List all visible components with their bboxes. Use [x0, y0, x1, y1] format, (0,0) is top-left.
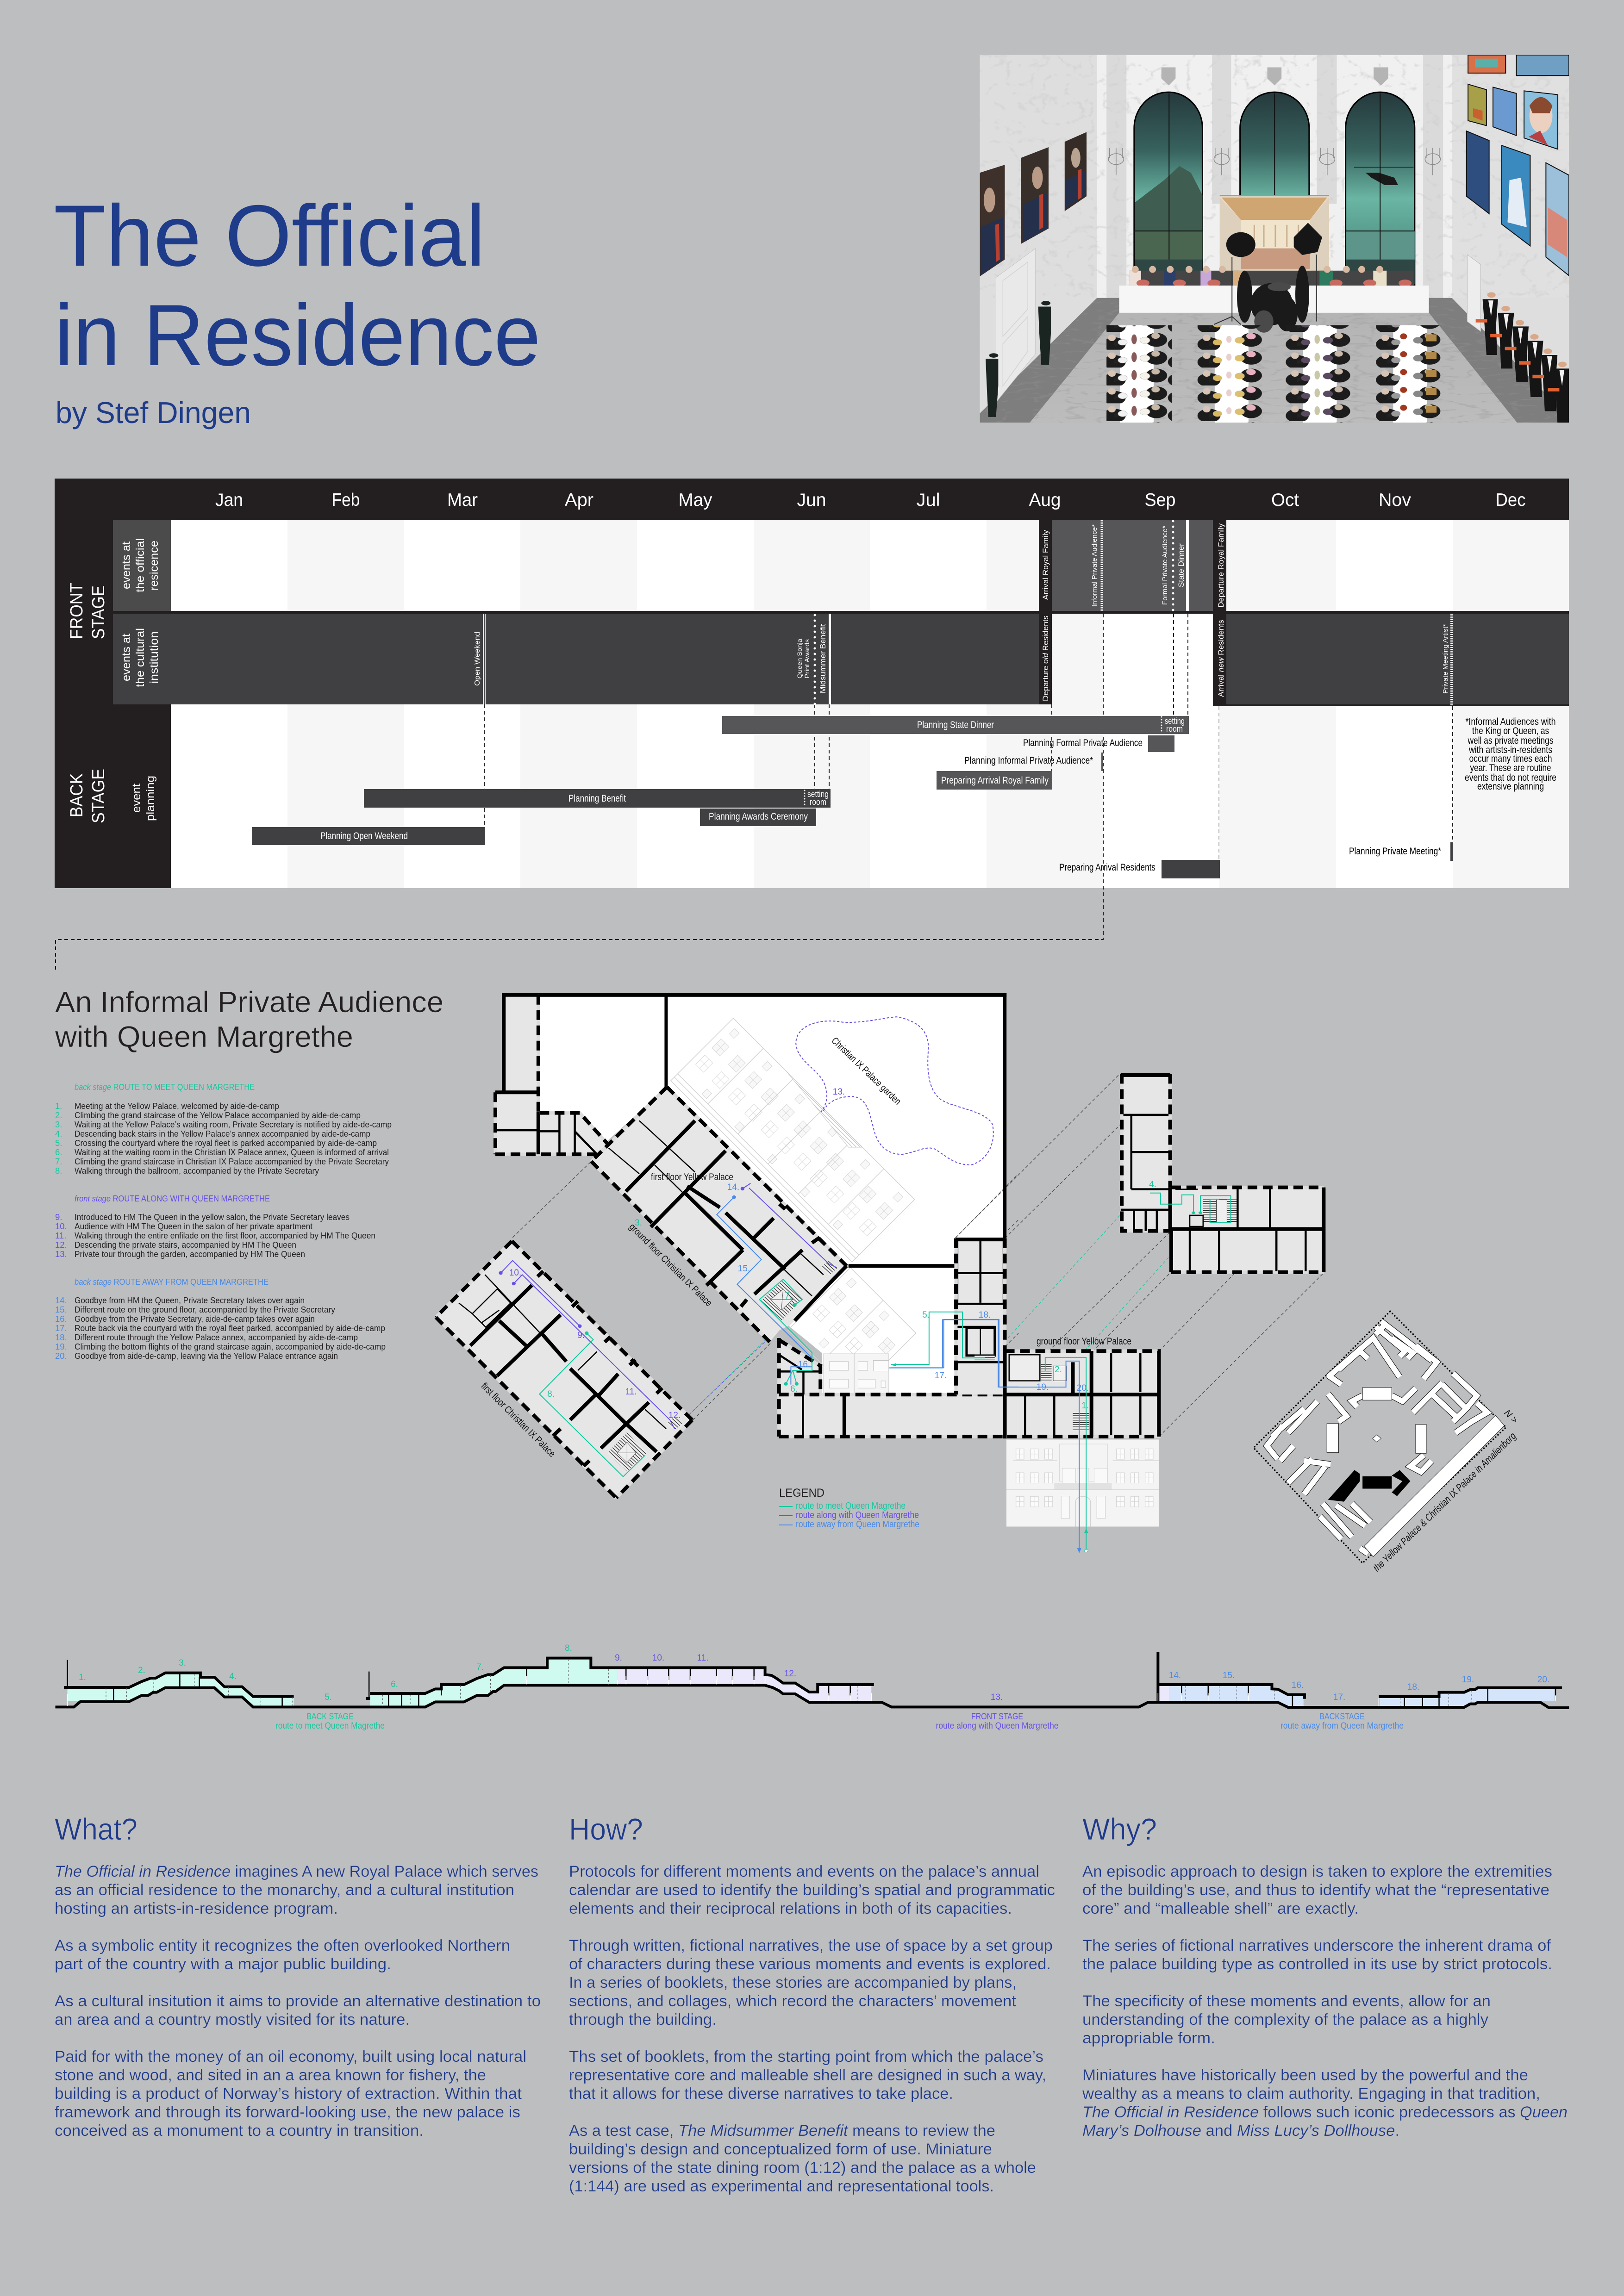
route list: along: 11. [55, 1231, 66, 1240]
row labels [120, 538, 161, 821]
text column: What?: stone and wood, and sited in an a area known for fishery, the [55, 2066, 486, 2084]
text column: What?: as an official residence to the monarchy, and a cultural institution [55, 1881, 514, 1899]
section route numbers: 20. [1537, 1675, 1549, 1685]
section captions [275, 1712, 1404, 1731]
planning labels [320, 716, 1441, 873]
month labels: Oct [1271, 490, 1299, 510]
crests [1162, 68, 1388, 86]
text column: How?: (1:144) are used as experimental and representational tools. [569, 2178, 994, 2195]
route list: to meet: 5. [55, 1138, 62, 1148]
section route numbers: 18. [1407, 1682, 1419, 1692]
route list: away: Goodbye from aide-de-camp, leaving via the Yellow Palace entrance again [75, 1351, 338, 1361]
text column: How?: In a series of booklets, these stories are accompanied by plans, [569, 1974, 1017, 1991]
sconces [1108, 148, 1440, 175]
section route numbers: 2. [138, 1666, 145, 1675]
section route numbers: 5. [325, 1692, 332, 1702]
route list: along: Private tour through the garden, accompanied by HM The Queen [75, 1249, 305, 1259]
event labels: Departure Royal Family [1217, 523, 1225, 608]
route list: to meet: Crossing the courtyard where the royal fleet is parked accompanied by aide-de-camp [75, 1138, 377, 1148]
section captions: route along with Queen Margrethe [936, 1721, 1058, 1731]
section route numbers: 9. [615, 1653, 622, 1663]
dining tables [1106, 325, 1172, 423]
plan route numbers: 8. [547, 1389, 555, 1399]
event labels: Midsummer Benefit [818, 624, 827, 693]
event labels: State Dinner [1177, 543, 1186, 587]
plan: west wing and walls [495, 995, 1006, 1266]
text column: Why?: Why? [1082, 1812, 1157, 1846]
row labels: resicence [148, 541, 161, 591]
band: royal stay [1052, 520, 1213, 611]
event labels: Arrival Royal Family [1041, 530, 1050, 600]
event labels: Arrival new Residents [1217, 620, 1225, 697]
route list: to meet: Walking through the ballroom, accompanied by the Private Secretary [75, 1166, 319, 1176]
route to meet [539, 1333, 645, 1477]
servants [1483, 299, 1569, 423]
band: cultural institution [171, 614, 1569, 706]
plan route numbers: 5. [922, 1310, 930, 1320]
plan labels: ground floor Yellow Palace [1037, 1336, 1131, 1347]
text column: What?: As a symbolic entity it recognizes the often overlooked Northern [55, 1937, 510, 1954]
legend [779, 1487, 919, 1530]
stage labels: BACK [67, 773, 87, 817]
event markers [483, 520, 1452, 706]
calendar footnote: the King or Queen, as [1472, 726, 1549, 736]
legend: route to meet Queen Magrethe [796, 1501, 906, 1511]
text column: What?: As a cultural insitution it aims to provide an alternative destination to [55, 1992, 541, 2010]
title: in Residence [55, 286, 541, 384]
route list: away: 14. [55, 1295, 67, 1305]
route list: to meet: 6. [55, 1147, 62, 1157]
plan route numbers: 20. [1077, 1383, 1089, 1393]
text column: How?: that it allows for these diverse narratives to take place. [569, 2085, 953, 2103]
planning labels: Planning State Dinner [917, 720, 994, 730]
plan route numbers: 3. [635, 1218, 642, 1228]
plan: first floor Christian IX Palace [436, 1241, 692, 1498]
text column: Why?: wealthy as a means to claim authority. Engaging in that tradition, [1082, 2085, 1540, 2103]
route list: along: 10. [55, 1221, 67, 1231]
month labels [215, 490, 1526, 510]
section route numbers: 14. [1169, 1671, 1181, 1680]
section route numbers: 15. [1223, 1671, 1235, 1680]
legend: route away from Queen Margrethe [796, 1519, 919, 1530]
plan route numbers: 10. [509, 1268, 521, 1278]
route list: to meet: 1. [55, 1101, 62, 1111]
route away [717, 1197, 812, 1385]
route list: to meet: Climbing the grand staircase in Christian IX Palace accompanied by the Private Secretary [75, 1157, 389, 1166]
route list: away: 15. [55, 1305, 67, 1314]
calendar footnote: year. These are routine [1470, 763, 1551, 773]
backdrop [1220, 196, 1329, 284]
text column: What?: conceived as a monument to a country in transition. [55, 2122, 424, 2140]
month labels: Jan [215, 490, 243, 510]
plan route numbers: 18. [979, 1310, 991, 1320]
text column: Why?: understanding of the complexity of the palace as a highly [1082, 2011, 1488, 2028]
text column: How?: of characters during these various moments and events is explored. [569, 1955, 1051, 1973]
plan route numbers: 17. [935, 1371, 947, 1381]
plan: ground floor Christian IX Palace [591, 1087, 847, 1342]
site plan: Amalienborg [1254, 1311, 1506, 1563]
small elevation [824, 1354, 889, 1394]
text column: Why?: The series of fictional narratives underscore the inherent drama of [1082, 1937, 1551, 1954]
section route numbers: 3. [179, 1658, 186, 1668]
calendar footnote: with artists-in-residents [1468, 745, 1552, 755]
text column: Why?: Miniatures have historically been used by the powerful and the [1082, 2066, 1528, 2084]
plan labels: ground floor Christian IX Palace [627, 1221, 714, 1308]
section route numbers: 8. [565, 1643, 572, 1653]
planning labels: Preparing Arrival Royal Family [941, 775, 1049, 786]
route section diagram [56, 1652, 1569, 1708]
text column: Why?: Mary’s Dolhouse and Miss Lucy’s Dollhouse. [1082, 2122, 1399, 2140]
section route numbers: 11. [697, 1653, 709, 1663]
plan: first floor Yellow Palace [1121, 1074, 1324, 1272]
route list: along: 13. [55, 1249, 67, 1259]
planning labels: Planning Awards Ceremony [709, 811, 808, 822]
route list: away: Goodbye from HM the Queen, Private Secretary takes over again [75, 1295, 305, 1305]
text column: What?: The Official in Residence imagines A new Royal Palace which serves [55, 1863, 538, 1880]
plan route numbers: 7. [785, 1291, 792, 1301]
route list: to meet: 3. [55, 1120, 62, 1129]
route list: to meet: 4. [55, 1129, 62, 1139]
event labels: Open Weekend [474, 632, 481, 686]
back wall [1097, 55, 1452, 299]
planning labels: setting [1165, 716, 1185, 726]
plan labels: first floor Yellow Palace [651, 1172, 733, 1182]
stage labels: STAGE [89, 585, 108, 639]
plan route numbers: 14. [727, 1182, 739, 1192]
row labels: planning [144, 776, 157, 821]
calendar footnote: well as private meetings [1468, 735, 1554, 746]
section route numbers: 6. [391, 1680, 398, 1689]
planning labels: room [810, 797, 826, 807]
route list: away: 16. [55, 1314, 67, 1324]
planning labels: room [1166, 724, 1183, 734]
route list: along: Audience with HM The Queen in the salon of her private apartment [75, 1221, 312, 1231]
annual calendar chart [55, 479, 1569, 971]
windows [1134, 92, 1415, 286]
event labels [474, 523, 1449, 701]
dashed event links [56, 614, 1453, 971]
door [995, 249, 1036, 403]
section captions: BACKSTAGE [1319, 1712, 1365, 1722]
route list: to meet: Waiting at the Yellow Palace’s waiting room, Private Secretary is notified by aide-de-camp [75, 1120, 392, 1129]
planning labels: Planning Informal Private Audience* [964, 755, 1093, 766]
stage labels: FRONT [67, 583, 87, 639]
text column: How?: representative core and malleable shell are designed in such a way, [569, 2066, 1046, 2084]
planning labels: Planning Benefit [568, 793, 626, 804]
route list: along: front stage ROUTE ALONG WITH QUEEN MARGRETHE [75, 1194, 270, 1203]
text column: What?: building is a product of Norway’s history of extraction. Within that [55, 2085, 522, 2103]
text column: Why?: The Official in Residence follows such iconic predecessors as Queen [1082, 2103, 1568, 2121]
text column: How? [569, 1812, 1055, 2195]
plan route numbers: 15. [738, 1264, 750, 1274]
facade elevation of Yellow Palace [1006, 1439, 1159, 1527]
text column: How?: calendar are used to identify the building’s spatial and programmatic [569, 1881, 1055, 1899]
site plan caption: the Yellow Palace & Christian IX Palace in Amalienborg [1371, 1430, 1518, 1574]
side walls [980, 55, 1097, 413]
legend: route along with Queen Margrethe [796, 1510, 919, 1520]
section route numbers: 10. [652, 1653, 664, 1663]
row labels: the cultural [134, 628, 147, 687]
guards [986, 301, 1051, 417]
planning labels: Planning Open Weekend [320, 831, 408, 841]
planning labels: setting [807, 790, 829, 799]
artworks right [1468, 55, 1505, 73]
section captions: route away from Queen Margrethe [1280, 1721, 1404, 1731]
event labels: Queen Sonja [796, 639, 803, 678]
route list: away: back stage ROUTE AWAY FROM QUEEN MARGRETHE [75, 1277, 269, 1287]
text column: Why?: The specificity of these moments and events, allow for an [1082, 1992, 1491, 2010]
route list: away: Route back via the courtyard with the royal fleet parked, accompanied by aide-de-camp [75, 1323, 385, 1333]
row labels: event [130, 784, 143, 813]
section route numbers: 19. [1462, 1675, 1474, 1685]
plan route numbers: 11. [625, 1387, 637, 1397]
month labels: Feb [331, 490, 360, 510]
section heading [55, 985, 443, 1053]
byline: by Stef Dingen [56, 396, 251, 429]
month labels: Mar [447, 490, 478, 510]
month labels: Aug [1029, 490, 1061, 510]
portraits left [980, 165, 1005, 276]
text column: Why?: appropriable form. [1082, 2029, 1215, 2047]
plan route numbers: 2. [1055, 1365, 1062, 1375]
calendar footnote: *Informal Audiences with [1466, 716, 1555, 727]
section captions: route to meet Queen Magrethe [275, 1721, 385, 1731]
plan route numbers: 19. [1037, 1382, 1049, 1392]
section route numbers: 12. [784, 1669, 796, 1679]
routes [499, 1017, 1230, 1553]
route list: along: Walking through the entire enfilade on the first floor, accompanied by HM The Queen [75, 1231, 375, 1240]
route list: away: 18. [55, 1332, 67, 1342]
guests row [1130, 266, 1413, 286]
route list: to meet: Descending back stairs in the Yellow Palace’s annex accompanied by aide-de-camp [75, 1129, 370, 1139]
text column: What?: What? [55, 1812, 137, 1846]
route list: to meet: back stage ROUTE TO MEET QUEEN MARGRETHE [75, 1082, 255, 1092]
plan: courtyard and garden [539, 997, 1004, 1395]
month labels: Jul [917, 490, 940, 510]
planning labels: Planning Private Meeting* [1349, 846, 1441, 857]
section route numbers [79, 1643, 1549, 1702]
plan route numbers: 1. [1081, 1401, 1089, 1411]
planning labels: Preparing Arrival Residents [1059, 862, 1156, 873]
site plan caption: N > [1502, 1408, 1519, 1425]
route list: along [55, 1194, 375, 1259]
event labels: Formal Private Audience* [1161, 526, 1169, 605]
route list: to meet: 7. [55, 1157, 62, 1166]
row label cells [113, 520, 171, 704]
section captions: BACK STAGE [306, 1712, 354, 1722]
row labels: the official [134, 538, 147, 592]
calendar backing [55, 479, 1569, 888]
planning bars [252, 716, 1453, 878]
route list: along: 9. [55, 1212, 62, 1222]
route list: away [55, 1277, 386, 1361]
stage labels: STAGE [89, 769, 108, 823]
plan route numbers: 4. [1149, 1180, 1156, 1189]
row labels: events at [120, 541, 133, 589]
route list: to meet [55, 1082, 392, 1176]
text column: How?: sections, and collages, which record the characters’ movement [569, 1992, 1017, 2010]
text column: How?: elements and their reciprocal relations in both of its capacities. [569, 1900, 1012, 1917]
planning labels: Planning Formal Private Audience [1023, 738, 1143, 748]
route list: along: Introduced to HM The Queen in the yellow salon, the Private Secretary leaves [75, 1212, 350, 1222]
text column: How?: Protocols for different moments and events on the palace’s annual [569, 1863, 1039, 1880]
head table [1119, 286, 1429, 313]
projection lines [512, 1161, 1018, 1473]
month labels: Jun [797, 490, 826, 510]
section fills [68, 1674, 294, 1706]
section captions: FRONT STAGE [971, 1712, 1023, 1722]
text column: What?: hosting an artists-in-residence program. [55, 1900, 338, 1917]
route list: away: 17. [55, 1323, 67, 1333]
section route numbers: 4. [229, 1672, 237, 1681]
text column: How?: versions of the state dining room (1:12) and the palace as a whole [569, 2159, 1036, 2177]
text column: Why?: the palace building type as controlled in its use by strict protocols. [1082, 1955, 1552, 1973]
route list: away: 20. [55, 1351, 67, 1361]
month labels: Dec [1495, 490, 1526, 510]
section route numbers: 13. [991, 1692, 1003, 1702]
event labels: Departure old Residents [1041, 616, 1050, 701]
route along [743, 1183, 837, 1268]
route list: along: 12. [55, 1240, 67, 1250]
text column: How?: through the building. [569, 2011, 717, 2028]
text column: What?: part of the country with a major public building. [55, 1955, 391, 1973]
section heading: An Informal Private Audience [55, 985, 443, 1019]
month labels: Sep [1144, 490, 1176, 510]
row labels: institution [148, 631, 161, 684]
month labels: Apr [565, 490, 593, 510]
plan labels: first floor Christian IX Palace [479, 1381, 557, 1459]
section route numbers: 16. [1292, 1680, 1304, 1690]
garden elevation [671, 1018, 915, 1262]
text column: Why?: core” and “malleable shell” are exactly. [1082, 1900, 1359, 1917]
text column: Why? [1082, 1812, 1568, 2140]
text column: How?: Ths set of booklets, from the starting point from which the palace’s [569, 2048, 1043, 2066]
plan route numbers [509, 1087, 1156, 1420]
text column: Why?: of the building’s use, and thus to identify what the “representative [1082, 1881, 1549, 1899]
plan route numbers: 9. [577, 1331, 585, 1340]
month labels: Nov [1379, 490, 1411, 510]
text column: How?: Through written, fictional narratives, the use of space by a set group [569, 1937, 1053, 1954]
calendar footnote: extensive planning [1477, 781, 1544, 792]
text column: What? [55, 1812, 541, 2140]
plan labels [479, 1035, 1131, 1459]
section lines [56, 1685, 833, 1707]
event labels: Informal Private Audience* [1091, 524, 1099, 607]
text column: How?: building’s design and conceptualized form of use. Miniature [569, 2140, 992, 2158]
route list: away: Different route on the ground floor, accompanied by the Private Secretary [75, 1305, 336, 1314]
text column: Why?: An episodic approach to design is taken to explore the extremities [1082, 1863, 1552, 1880]
collage image: state dining room [972, 46, 1574, 435]
route list: away: Different route through the Yellow Palace annex, accompanied by aide-de-camp [75, 1332, 358, 1342]
title: The Official [54, 187, 485, 284]
title [54, 187, 541, 384]
stage labels [67, 583, 108, 823]
section route numbers: 1. [79, 1673, 86, 1682]
plan route numbers: 6. [790, 1384, 798, 1394]
route list: to meet: Meeting at the Yellow Palace, welcomed by aide-de-camp [75, 1101, 279, 1111]
month labels: May [679, 490, 712, 510]
legend: LEGEND [779, 1487, 824, 1500]
section route numbers: 7. [476, 1662, 484, 1672]
route list: to meet: 8. [55, 1166, 62, 1176]
route list: away: 19. [55, 1342, 67, 1351]
route list: to meet: 2. [55, 1110, 62, 1120]
text column: What?: an area and a country mostly visited for its nature. [55, 2011, 410, 2028]
calendar footnote: events that do not require [1465, 772, 1556, 783]
calendar footnote: occur many times each [1469, 753, 1552, 764]
calendar footnote [1465, 716, 1556, 792]
plan: ground floor Yellow Palace and annex [779, 1238, 1159, 1438]
event labels: Private Meeting Artist* [1442, 624, 1449, 694]
plan route numbers: 13. [833, 1087, 845, 1097]
text column: What?: framework and through its forward-looking use, the new palace is [55, 2103, 520, 2121]
row labels: events at [120, 634, 133, 681]
plan route numbers: 16. [798, 1360, 810, 1369]
section heading: with Queen Margrethe [55, 1020, 353, 1053]
floor [980, 298, 1574, 423]
route list: to meet: Climbing the grand staircase of the Yellow Palace accompanied by aide-de-camp [75, 1110, 361, 1120]
event labels: Print Awards [803, 639, 811, 678]
photographers and lights [1214, 223, 1322, 333]
plan labels: Christian IX Palace garden [830, 1035, 903, 1107]
plan route numbers: 12. [668, 1411, 681, 1420]
route list: to meet: Waiting at the waiting room in the Christian IX Palace annex, Queen is informed of arrival [75, 1147, 389, 1157]
route list: along: Descending the private stairs, accompanied by HM The Queen [75, 1240, 296, 1250]
text column: How?: As a test case, The Midsummer Benefit means to review the [569, 2122, 995, 2140]
month stripes [171, 520, 1569, 888]
route list: away: Goodbye from the Private Secretary, aide-de-camp takes over again [75, 1314, 315, 1324]
text column: How?: How? [569, 1812, 643, 1846]
route list: away: Climbing the bottom flights of the grand staircase again, accompanied by aide-de-camp [75, 1342, 386, 1351]
yellow palace main [1005, 1351, 1159, 1437]
text column: What?: Paid for with the money of an oil economy, built using local natural [55, 2048, 526, 2066]
section route numbers: 17. [1333, 1692, 1345, 1702]
